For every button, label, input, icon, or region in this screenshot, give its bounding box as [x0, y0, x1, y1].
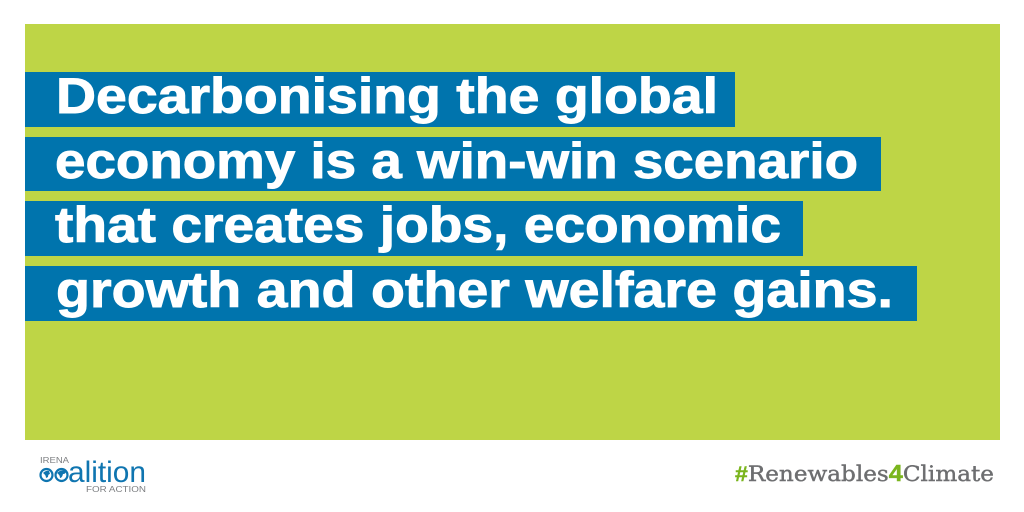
logo wordmark: alition: alition [68, 456, 146, 489]
logo: IRENA Coalition for Action [40, 455, 146, 494]
hashtag: Renewables4Climate: #Renewables 4Climate [735, 460, 994, 486]
logo label: for action: FOR ACTION [86, 484, 146, 494]
headline line 4: growth and other welfare gains. [56, 262, 893, 318]
headline line 2: economy is a win-win scenario [55, 133, 858, 189]
headline block [25, 68, 917, 321]
icon: globe o [56, 469, 68, 481]
headline line 3: that creates jobs, economic [55, 197, 781, 253]
logo label: IRENA: IRENA [40, 455, 69, 465]
icon: globe c [40, 469, 52, 481]
panel: green background [25, 24, 1000, 440]
headline line 1: Decarbonising the global [56, 68, 718, 124]
